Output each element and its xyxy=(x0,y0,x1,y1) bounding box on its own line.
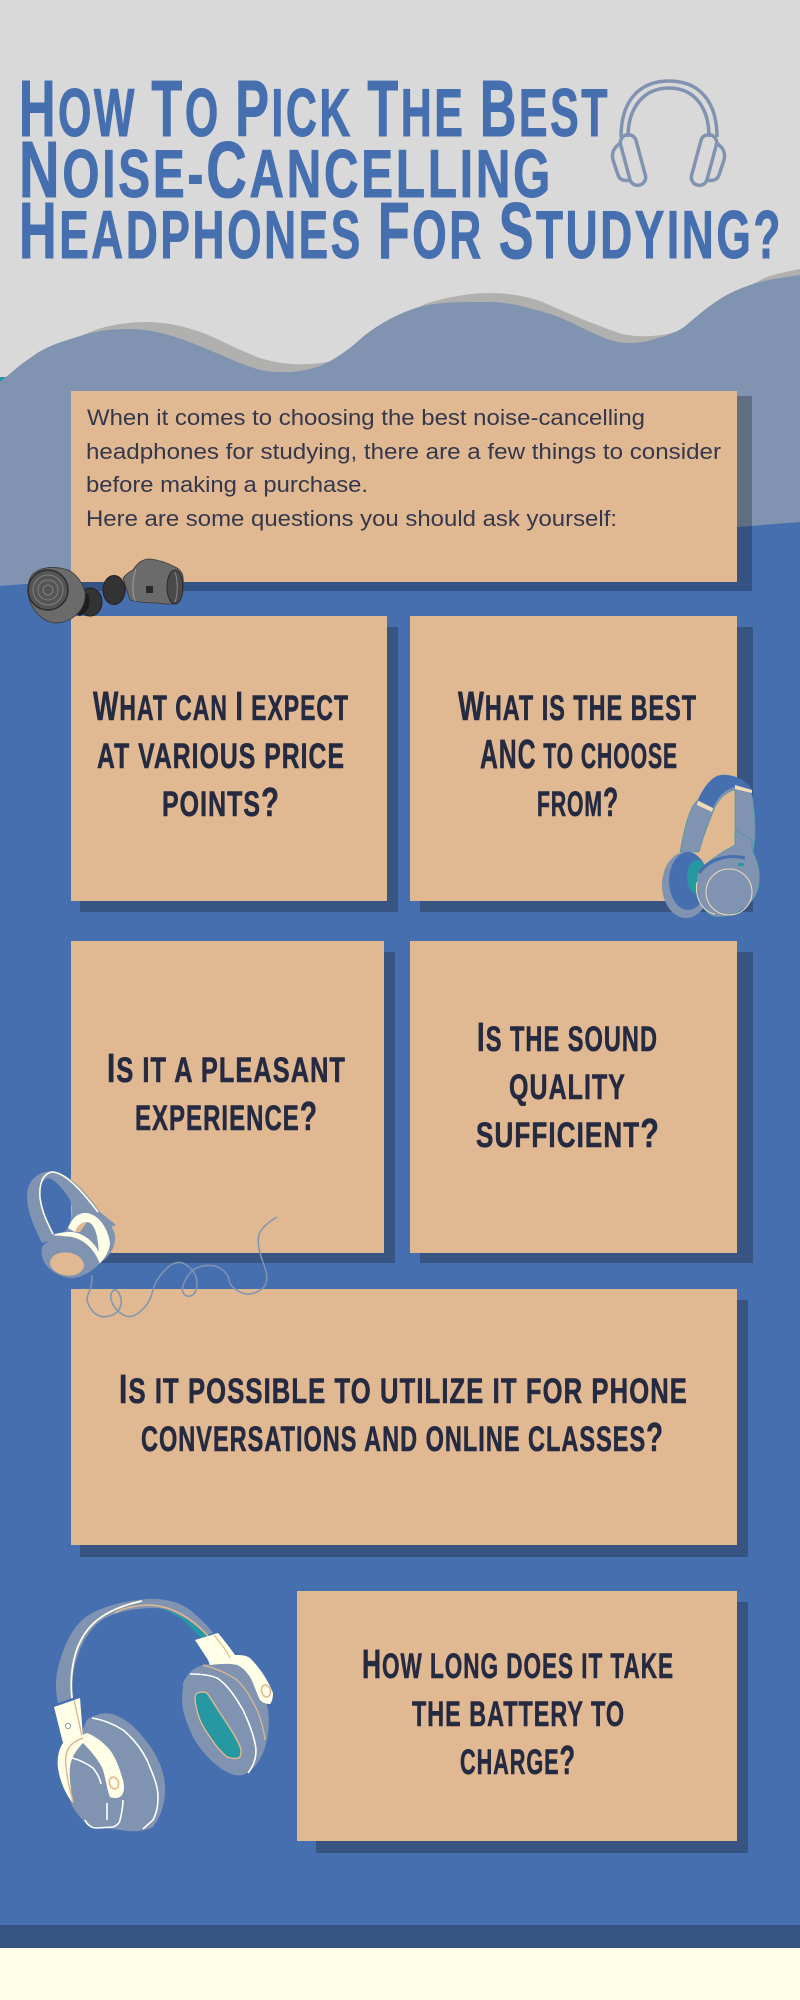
panel: battery question xyxy=(297,1591,748,1853)
panel: price points question xyxy=(71,616,398,912)
icon: earbuds xyxy=(28,559,183,623)
left cup white lines xyxy=(72,1718,158,1829)
panel: pleasant experience question: IS IT A PLEASANT xyxy=(107,1045,346,1091)
intro text: before making a purchase. xyxy=(86,472,368,497)
left slider xyxy=(54,1698,83,1743)
right yoke xyxy=(195,1633,273,1704)
headband xyxy=(27,1171,116,1243)
left ear cup xyxy=(70,1713,165,1831)
panel: pleasant experience question xyxy=(71,941,395,1263)
title: NOISE-CANCELLING xyxy=(19,125,553,214)
panel: pleasant experience question: EXPERIENCE? xyxy=(135,1093,318,1139)
panel: battery question: CHARGE? xyxy=(460,1737,576,1783)
cable xyxy=(87,1217,277,1317)
icon: headphones with cable xyxy=(27,1171,277,1317)
icon: outline headphones xyxy=(612,81,725,187)
intro text: Here are some questions you should ask yourself: xyxy=(86,506,617,531)
bottom cream strip xyxy=(0,1948,800,2000)
right ear cup xyxy=(182,1663,269,1776)
intro text: When it comes to choosing the best noise-cancelling xyxy=(87,405,645,430)
intro text xyxy=(86,405,721,531)
headband xyxy=(56,1599,213,1703)
icon: headphones over ANC card xyxy=(662,775,760,918)
back wave xyxy=(77,269,800,400)
panel: phone conversations question xyxy=(71,1289,748,1557)
bottom dark band xyxy=(0,1925,800,1948)
ear cup xyxy=(42,1212,115,1278)
teal sliver xyxy=(0,377,6,382)
title: HOW TO PICK THE BEST xyxy=(19,64,610,153)
panel: ANC question: WHAT IS THE BEST xyxy=(458,683,697,729)
panel: battery question: THE BATTERY TO xyxy=(412,1695,625,1734)
panel: sound quality question: QUALITY xyxy=(509,1068,626,1107)
panel: sound quality question: SUFFICIENT? xyxy=(476,1110,660,1156)
panel: ANC question: ANC TO CHOOSE xyxy=(480,731,678,777)
panel: ANC question: FROM? xyxy=(537,779,619,825)
intro text: headphones for studying, there are a few things to consider xyxy=(86,439,721,464)
icon: large headphones xyxy=(54,1599,273,1831)
earbud dots xyxy=(146,586,153,593)
panel: price points question: POINTS? xyxy=(162,779,280,825)
blue main background xyxy=(0,522,800,1925)
panel: intro xyxy=(71,391,752,591)
panel: sound quality question xyxy=(410,941,753,1263)
panel: price points question: AT VARIOUS PRICE xyxy=(97,737,345,776)
panel: price points question: WHAT CAN I EXPECT xyxy=(93,683,349,729)
left yoke xyxy=(58,1733,124,1803)
panel: ANC question xyxy=(410,616,753,912)
title xyxy=(19,64,783,275)
front wave xyxy=(0,275,800,600)
panel: sound quality question: IS THE SOUND xyxy=(477,1014,658,1060)
